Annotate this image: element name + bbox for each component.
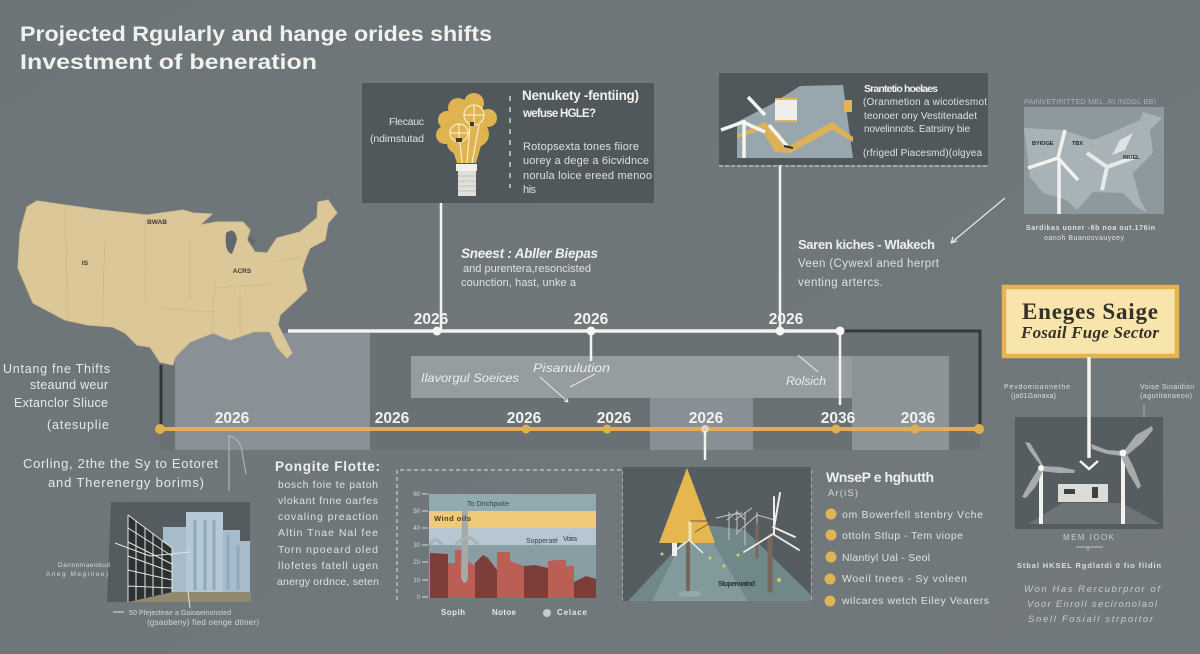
panel: wind farm scene: Stuperwatnd <box>718 581 755 588</box>
text block: Saren kiches <box>798 237 940 289</box>
arrow: map to text <box>951 198 1005 243</box>
text block: Wnse highlights list <box>824 469 989 607</box>
icon: wind turbine left <box>1022 442 1075 524</box>
panel: turbines and storage: Voor Enroll secironolaol <box>1027 599 1158 610</box>
panel: building with solar facade: Dannomaeobud <box>58 562 110 569</box>
chart: stacked energy bars: 0 <box>417 595 421 601</box>
text block: Pongite Flotte: Pongite Flotte: <box>275 459 380 474</box>
panel: lightbulb idea: uorey a dege a 6icvidnce <box>523 155 649 167</box>
title <box>20 23 492 74</box>
text block: left shifts note <box>3 362 110 432</box>
text block: Pongite Flotte: Altin Tnae Nal fee <box>278 527 378 539</box>
timeline band labels: Ilavorgul Soeices <box>421 371 519 385</box>
icon: thin pointer outline <box>229 436 246 491</box>
panel: lightbulb idea: wefuse HGLE? <box>522 108 596 120</box>
timeline: lower yellow line <box>155 424 984 460</box>
panel: turbines and storage: Snell Fosiall strpoitor <box>1028 614 1154 625</box>
panel: building with solar facade <box>46 502 259 627</box>
text block: Wnse highlights list: wilcares wetch Eiley Vearers <box>841 595 989 607</box>
text block: Saren kiches: Veen (Cywexl aned herprt <box>798 258 940 270</box>
panel: turbines and storage: MEM IOOK <box>1063 533 1115 542</box>
timeline year labels: 2026 <box>689 410 724 427</box>
text block: Sneest note <box>461 246 598 289</box>
chart: stacked energy bars: 60 <box>413 492 421 498</box>
panel: regional map with turbines: Sardikas uoner -6b noa out.176in <box>1026 225 1155 232</box>
text block: left lower note: Corling, 2the the Sy to Eotoret <box>23 456 218 471</box>
panel: turbines and storage: Voise Sinaidisn <box>1140 384 1194 391</box>
panel: regional map with turbines: RIUEL <box>1123 155 1140 161</box>
panel: building with solar facade: Aneg Meginoe) <box>46 571 108 578</box>
panel: timeline background bands <box>160 333 980 450</box>
text block: Saren kiches: Saren kiches - Wlakech <box>798 237 935 252</box>
panel: wind and chart: Srantetio hoelaes <box>864 83 938 95</box>
panel: lightbulb idea <box>362 83 654 203</box>
timeline band labels: Pisanulution <box>533 361 610 375</box>
arrow: sign to panel <box>1080 357 1098 469</box>
text block: Pongite Flotte: Torn npoeard oled <box>278 544 378 556</box>
panel: wind and chart <box>719 73 988 166</box>
icon: foreground turbine right <box>744 493 799 590</box>
icon: wind turbine right <box>1091 426 1153 524</box>
panel: lightbulb idea: his <box>523 184 536 196</box>
text block: Wnse highlights list: Woeil tnees - Sy voleen <box>842 573 967 585</box>
panel: lightbulb idea: Flecauc <box>389 116 424 128</box>
panel: wind and chart: novelinnots. Eatrsiny bie <box>864 124 970 135</box>
panel: turbines and storage: (ja01Ganaxa) <box>1011 393 1056 400</box>
panel: wind and chart: (rfrigedl Piacesmd)(olgyea <box>863 148 982 159</box>
text block: left lower note: and Therenergy borims) <box>48 475 204 490</box>
chart: stacked energy bars: Sopih <box>441 608 465 617</box>
chart: stacked energy bars: Notoe <box>492 608 517 617</box>
callout: energy sector sign: Fosail Fuge Sector <box>1020 323 1159 342</box>
timeline band labels: Rolsich <box>786 374 826 388</box>
panel: turbines and storage <box>1004 357 1194 625</box>
text block: Pongite Flotte: anergy ordnce, seten <box>277 576 379 588</box>
timeline year labels: 2026 <box>215 410 250 427</box>
panel: regional map with turbines: BYIOGE <box>1032 141 1054 147</box>
panel: regional map with turbines: TBX <box>1072 141 1083 147</box>
text block: Sneest note: Sneest : Abller Biepas <box>461 246 598 261</box>
text block: Wnse highlights list: ottoln Stlup - Tem viope <box>842 530 963 542</box>
text block: left shifts note: Extanclor Sliuce <box>14 396 108 410</box>
map: United States: IS <box>82 260 89 267</box>
text block: Wnse highlights list: WnseP e hghutth <box>826 469 934 485</box>
text block: Wnse highlights list: Ar(iS) <box>828 488 858 499</box>
panel: turbines and storage: (agutitanaeoo) <box>1140 393 1192 400</box>
timeline year labels: 2026 <box>769 311 804 328</box>
timeline year labels: 2026 <box>574 311 609 328</box>
timeline year labels <box>215 311 936 427</box>
text block: Sneest note: and purentera,resoncisted <box>463 263 591 275</box>
text block: left shifts note: steaund weur <box>30 378 108 392</box>
panel: wind and chart: teonoer ony Vestitenadet <box>864 111 977 122</box>
panel: lightbulb idea: norula loice ereed menoo <box>523 170 652 182</box>
chart: stacked energy bars <box>413 492 596 617</box>
chart: stacked energy bars: Sopperaté <box>526 538 558 545</box>
text block: Pongite Flotte: covaling preaction <box>278 511 378 523</box>
timeline: upper white line <box>161 165 980 428</box>
timeline year labels: 2036 <box>821 410 856 427</box>
panel: wind farm scene <box>623 467 811 601</box>
chart: stacked energy bars: Wind oils <box>434 514 471 523</box>
panel: building with solar facade: 50 Pfejecteae a Gaioaeinonsted <box>129 610 231 617</box>
text block: Saren kiches: venting artercs. <box>798 277 883 289</box>
text block: Sneest note: counction, hast, unke a <box>461 277 577 289</box>
icon: lightbulb <box>436 93 497 196</box>
title: Projected Rgularly and hange orides shifts <box>20 23 492 46</box>
text block: Pongite Flotte: vlokant fnne oarfes <box>278 495 378 507</box>
chart: stacked energy bars: 30 <box>413 543 421 549</box>
callout: energy sector sign <box>1004 287 1177 356</box>
text block: left shifts note: Untang fne Thifts <box>3 362 110 376</box>
text block: Pongite Flotte <box>275 459 380 588</box>
callout: energy sector sign: Eneges Saige <box>1022 299 1158 324</box>
map: United States: ACRS <box>233 268 252 275</box>
chart: stacked energy bars: 40 <box>413 526 421 532</box>
timeline year labels: 2026 <box>597 410 632 427</box>
map: United States: BWAB <box>147 219 167 226</box>
title: Investment of beneration <box>20 51 317 74</box>
timeline year labels: 2026 <box>414 311 449 328</box>
panel: regional map with turbines <box>1024 97 1164 242</box>
text block: left shifts note: (atesuplie <box>47 418 109 432</box>
chart: stacked energy bars: 20 <box>413 560 421 566</box>
text block: Wnse highlights list: Nlantiyl Ual - Seol <box>842 552 930 564</box>
panel: lightbulb idea: Rotopsexta tones fiiore <box>523 141 639 153</box>
icon: distant turbines row <box>716 508 775 545</box>
chart: stacked energy bars: 10 <box>413 578 421 584</box>
chart: stacked energy bars: Voira <box>563 536 577 543</box>
panel: regional map with turbines: oanoh Buanosvauyoey <box>1044 235 1124 242</box>
panel: lightbulb idea: (ndimstutad <box>370 133 424 145</box>
panel: turbines and storage: Won Has Rercubrpror of <box>1024 584 1161 595</box>
panel: wind and chart: (Oranmetion a wicotiesmot <box>863 97 987 108</box>
text block: left lower note <box>23 456 218 490</box>
panel: turbines and storage: Pevdoeioannethe <box>1004 384 1070 391</box>
text block: Wnse highlights list: om Bowerfell stenbry Vche <box>842 509 983 521</box>
text block: Pongite Flotte: bosch foie te patoh <box>278 479 378 491</box>
panel: regional map with turbines: PAINVETIRITTED MEL .RI /NOGL BB) <box>1024 97 1156 106</box>
timeline year labels: 2026 <box>375 410 410 427</box>
timeline year labels: 2036 <box>901 410 936 427</box>
timeline year labels: 2026 <box>507 410 542 427</box>
panel: lightbulb idea: Nenukety -fentiing) <box>522 88 639 103</box>
chart: stacked energy bars: To Dnchpoite <box>467 501 509 508</box>
panel: turbines and storage: Stbal HKSEL Rgdlatdi 0 fio flldin <box>1017 561 1161 570</box>
chart: stacked energy bars: Celace <box>557 608 588 617</box>
icon: foreground turbine left <box>673 520 715 594</box>
text block: Pongite Flotte: llofetes fatell ugen <box>278 560 378 572</box>
timeline band labels <box>421 355 826 402</box>
chart: stacked energy bars: 50 <box>413 509 421 515</box>
panel: building with solar facade: (gsaobeny) fied oenge dtiner) <box>147 618 259 627</box>
icon: wind turbine <box>721 97 793 158</box>
map: United States <box>18 200 337 365</box>
dashed frame <box>397 470 811 600</box>
